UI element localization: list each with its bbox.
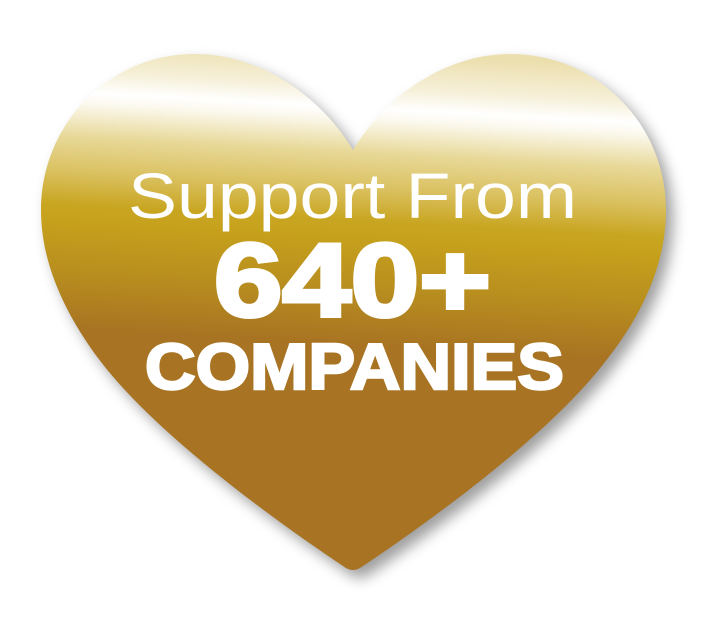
gold heart bbox=[41, 54, 666, 570]
heading: Support From: Support From bbox=[128, 160, 577, 232]
heart shadow bbox=[48, 62, 673, 578]
label: COMPANIES: COMPANIES bbox=[145, 330, 564, 403]
number: 640+: 640+ bbox=[214, 223, 491, 339]
